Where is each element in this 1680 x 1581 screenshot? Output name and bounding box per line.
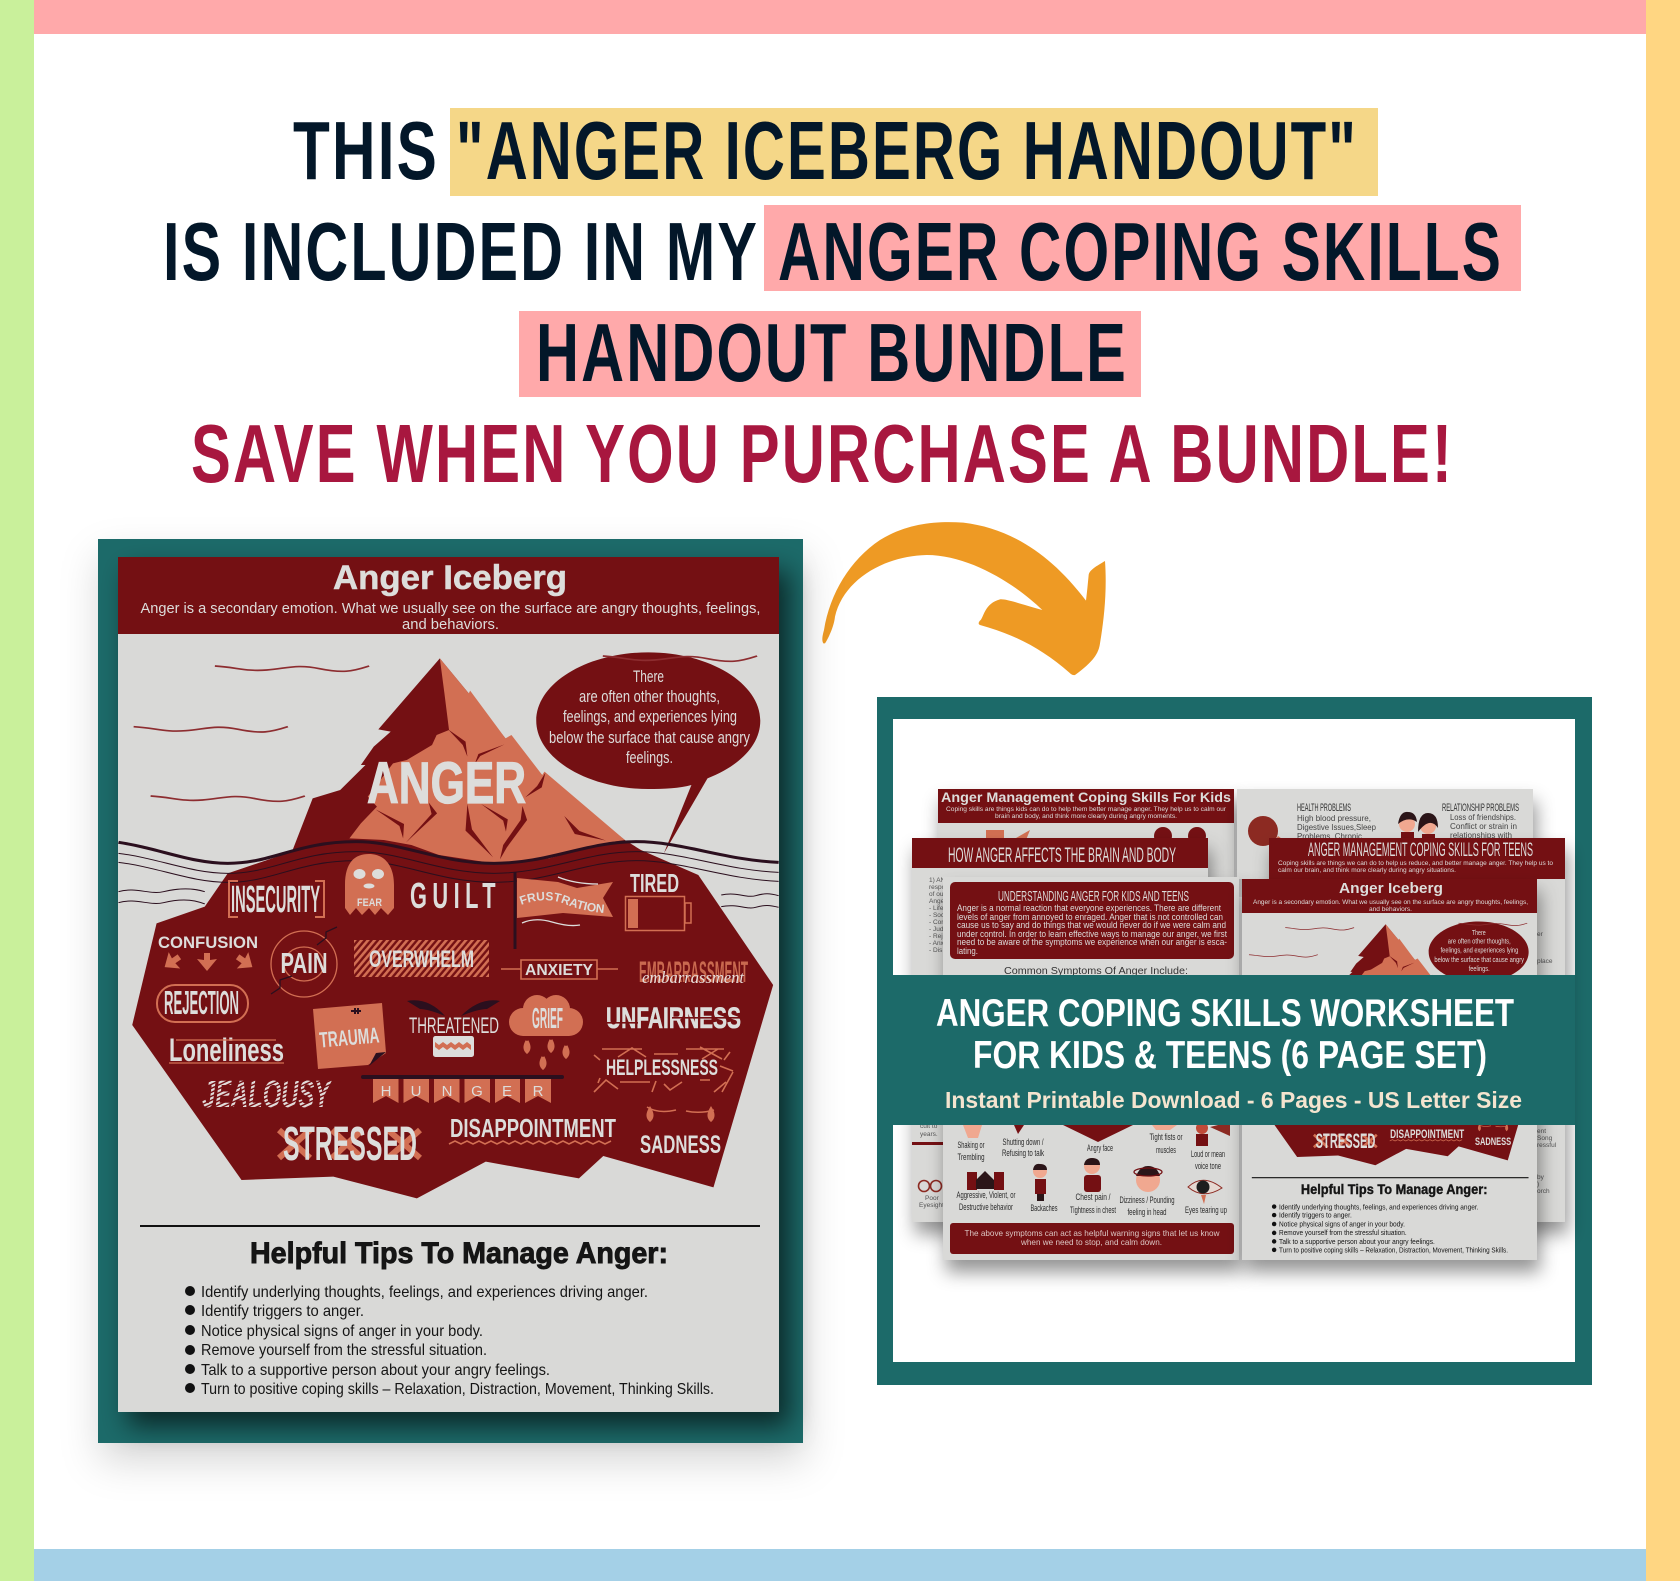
symptom labels: Backaches [1030,1203,1058,1213]
mini page: how anger affects the brain and body [912,838,1208,1222]
mini page: anger iceberg [1242,879,1537,1260]
icon: hunger banner [363,1077,562,1103]
word: loneliness [169,1032,284,1068]
mini page: understanding anger for kids and teens: lating. [957,946,978,956]
mini iceberg scaled: feelings, and experiences lying [1441,946,1518,955]
warning note box: when we need to stop, and calm down. [1020,1237,1162,1247]
symptom labels: Shaking or [958,1140,984,1150]
mini page: understanding anger for kids and teens: cause us to say and do things that we would never do if we were calm and [957,920,1226,930]
mini page: understanding anger for kids and teens [943,877,1239,1260]
mini page: anger iceberg: Anger Iceberg [1339,880,1443,897]
mini page: how anger affects the brain and body: - Dis [929,947,943,954]
handout header band: Anger Iceberg [333,559,567,597]
mini page: anger iceberg: and behaviors. [1369,906,1412,913]
border: right yellow band [1646,0,1680,1581]
word: pain with target [271,927,337,997]
mini page: how anger affects the brain and body: of ou [929,891,944,898]
panel: left teal handout frame [84,539,821,1477]
icon: fear ghost [345,854,394,915]
tips section: Identify underlying thoughts, feelings, and experiences driving anger. [201,1284,648,1301]
mini page: coping skills for teens: calm our brain, and think more clearly during angry situations. [1278,867,1456,874]
tips section: Helpful Tips To Manage Anger: [250,1237,668,1270]
label: ANGER: ANGER [367,751,526,816]
icon: threatened face [407,1000,500,1057]
symptom labels: Eyes tearing up [1185,1205,1227,1215]
word: unfairness [604,1002,742,1035]
word: loneliness: Loneliness [169,1032,284,1068]
word: helplessness hatched [594,1047,733,1092]
bubble text: feelings, and experiences lying [563,707,737,726]
bubble text: below the surface that cause angry [549,728,750,747]
symptom labels: Angry face [1087,1143,1113,1153]
panel: left teal handout frame: EMBARRASSMENT [639,956,748,989]
iceberg illustration [118,652,779,1198]
word: anxiety box [501,960,618,979]
iceberg cracks [376,729,606,859]
mini page: coping skills for teens: er [1537,931,1544,938]
mini iceberg scaled: SADNESS [1475,1136,1511,1148]
panel: right teal product frame [877,697,1592,1385]
symptom labels: Shutting down / [1002,1137,1044,1147]
mini iceberg scaled: feelings. [1469,964,1490,973]
mini page: coping skills for teens: ent [1537,1128,1546,1135]
symptom icons [963,1122,1230,1204]
word: confusion with arrows: CONFUSION [158,933,258,952]
mini page: how anger affects the brain and body: Eyesight [919,1202,944,1209]
banner: product title [893,975,1575,1125]
mini page: how anger affects the brain and body: respo [929,884,946,891]
mini page: coping skills for teens: by [1537,1174,1545,1181]
iceberg body [132,658,773,1198]
tips section: Remove yourself from the stressful situation. [201,1342,487,1359]
icon: trauma sticky note: TRAUMA [318,1022,380,1053]
tips section [140,1225,760,1398]
handout header band: Anger is a secondary emotion. What we usually see on the surface are angry thoughts, feelings, [140,601,760,617]
word: overwhelm scribble [354,940,489,977]
tips section: Talk to a supportive person about your angry feelings. [201,1362,550,1379]
warning note box [950,1223,1234,1254]
symptom labels: voice tone [1195,1161,1221,1171]
mini iceberg scaled: Turn to positive coping skills – Relaxation, Distraction, Movement, Thinking Skills. [1279,1247,1508,1255]
symptom labels: feeling in head [1128,1207,1166,1217]
water lines [118,842,779,908]
icon: hunger banner: U [411,1083,421,1100]
mini page: coping skills for teens: orch [1537,1188,1550,1195]
symptom labels: Tight fists or [1150,1132,1182,1142]
speech bubble [536,652,760,853]
mini page: coping skills for teens: ressful [1537,1142,1557,1149]
panel: left teal handout frame: REJECTION [164,984,239,1021]
title headline: THIS [293,104,439,197]
border: top pink band [0,0,1680,34]
word: embarrassment: embarrassment [642,968,745,987]
mini page: how anger affects the brain and body: - Anx [929,940,945,947]
icon: hunger banner: N [442,1083,452,1100]
symptom labels: Dizziness / Pounding [1120,1195,1174,1205]
mini page: how anger affects the brain and body: cult to [920,1123,938,1130]
mini page: health and relationship problems: RELATIONSHIP PROBLEMS [1442,802,1519,814]
handout header band: and behaviors. [402,617,499,633]
word: insecurity [229,879,324,921]
word: sadness: SADNESS [640,1131,721,1159]
mini iceberg scaled: Notice physical signs of anger in your body. [1279,1221,1405,1229]
word: pain with target: PAIN [280,948,328,980]
mini page: understanding anger for kids and teens: UNDERSTANDING ANGER FOR KIDS AND TEENS [998,888,1189,905]
word: helplessness hatched: HELPLESSNESS [606,1055,718,1080]
icon: frustration flag: FRUSTRATION [519,892,604,913]
mini page: health and relationship problems: High blood pressure, [1297,813,1371,823]
mini page: health and relationship problems: Digestive Issues,Sleep [1297,822,1376,832]
panel: left teal handout frame: INSECURITY [231,879,320,921]
symptom labels: Trembling [958,1152,984,1162]
word: disappointment: DISAPPOINTMENT [450,1113,616,1143]
mini iceberg scaled: There [1472,928,1486,937]
iceberg orange face [349,658,625,863]
symptom labels: Destructive behavior [959,1202,1013,1212]
symptom labels: Chest pain / [1076,1192,1111,1202]
icon: grief cloud: GRIEF [532,1003,563,1035]
symptom labels: Loud or mean [1191,1149,1225,1159]
word: jealousy: JEALOUSY [202,1074,332,1116]
tips section: Notice physical signs of anger in your body. [201,1323,483,1340]
mini page: coping skills for kids [938,789,1234,879]
mini page: coping skills for teens [1269,838,1565,1222]
mini iceberg scaled: STRESSED [1316,1129,1375,1153]
mini iceberg scaled: DISAPPOINTMENT [1390,1128,1464,1141]
mini iceberg scaled [1242,922,1537,1255]
mini page: coping skills for kids: Anger Management Coping Skills For Kids [941,789,1231,805]
word: guilt: GUILT [410,875,501,916]
mini page: how anger affects the brain and body: - Cor [929,919,944,926]
mini page: understanding anger for kids and teens: need to be aware of the symptoms we experience when our anger is esca- [957,937,1227,947]
title headline: IS INCLUDED IN MY [163,205,759,298]
word: overwhelm scribble: OVERWHELM [369,946,474,973]
icon: hunger banner: H [381,1083,391,1100]
icon: threatened face: THREATENED [409,1013,499,1038]
word: rejection pill [157,984,248,1022]
mini page: coping skills for teens: Song [1537,1135,1553,1142]
icon: trauma sticky note [313,1003,386,1069]
symptom labels: Refusing to talk [1002,1148,1044,1158]
handout page [118,557,779,1412]
mini page: health and relationship problems: HEALTH PROBLEMS [1297,802,1351,814]
bubble text [549,667,750,767]
mini page: health and relationship problems: Problems, Chronic [1297,831,1363,841]
mini page: how anger affects the brain and body: Ange [929,898,945,905]
symptom labels: Tightness in chest [1070,1205,1116,1215]
mini page: how anger affects the brain and body: - Rej [929,933,943,940]
mini iceberg scaled: Identify underlying thoughts, feelings, and experiences driving anger. [1279,1203,1479,1211]
word: embarrassment [639,956,748,989]
tips section: Turn to positive coping skills – Relaxation, Distraction, Movement, Thinking Skills. [201,1381,714,1398]
mini page: health and relationship problems: Loss of friendships. [1450,812,1516,822]
icon: hunger banner: E [502,1083,512,1100]
word: anxiety box: ANXIETY [525,962,593,979]
bubble text: There [633,667,664,686]
word: stressed: STRESSED [283,1118,417,1171]
mini page: understanding anger for kids and teens: Common Symptoms Of Anger Include: [1004,965,1188,977]
mini page: coping skills for teens: Coping skills are things we can do to help us reduce, and better manage anger. They help us to [1278,860,1553,867]
mini page: anger iceberg: Anger is a secondary emotion. What we usually see on the surface are angry thoughts, feelings, [1253,899,1528,906]
mini iceberg scaled: Helpful Tips To Manage Anger: [1301,1182,1487,1197]
border: bottom blue band [34,1549,1646,1581]
highlight: anger iceberg handout [450,108,1378,196]
banner: product title: Instant Printable Download - 6 Pages - US Letter Size [945,1087,1522,1113]
mini iceberg scaled: Identify triggers to anger. [1279,1212,1352,1220]
banner: product title: FOR KIDS & TEENS (6 PAGE SET) [973,1034,1487,1077]
mini page: how anger affects the brain and body: HOW ANGER AFFECTS THE BRAIN AND BODY [948,844,1176,867]
highlight: anger coping skills [764,205,1521,291]
lower word decorations [279,1107,714,1158]
mini page: how anger affects the brain and body: 1) AN [929,877,946,884]
symptom labels [956,1132,1227,1217]
border: left green band [0,0,34,1581]
mini iceberg scaled: below the surface that cause angry [1434,955,1524,964]
title headline: HANDOUT BUNDLE [536,306,1128,399]
mini page: health and relationship problems [1237,789,1533,879]
icon: grief cloud [509,995,583,1068]
symptom labels: muscles [1156,1145,1176,1155]
icon: fear ghost: FEAR [357,897,382,909]
mini page: coping skills for kids: brain and body, and think more clearly during angry moments. [995,813,1177,820]
bubble text: are often other thoughts, [579,687,720,706]
icon: tired battery: TIRED [630,868,679,898]
warning note box: The above symptoms can act as helpful warning signs that let us know [964,1228,1220,1238]
highlight: handout bundle [519,311,1141,397]
mini page: understanding anger for kids and teens: under control. In order to learn effective ways to manage our anger, we first [957,929,1227,939]
mini page: how anger affects the brain and body: - Jud [929,926,944,933]
icon: hunger banner: R [533,1083,544,1100]
icon: hunger banner: G [471,1083,483,1100]
title headline [163,104,1521,500]
mini page: health and relationship problems: relationships with [1450,830,1512,840]
sky wave lines [134,666,369,801]
mini page: coping skills for kids: Coping skills are things kids can do to help them better manage anger. They help us to calm our [946,806,1227,813]
symptom labels: Aggressive, Violent, or [956,1190,1016,1200]
mini page: coping skills for teens: place [1537,958,1553,965]
arrow: orange curved arrow [822,522,1106,675]
mini page: how anger affects the brain and body: Poor [925,1195,940,1202]
mini page: coping skills for teens: ) [1537,1181,1539,1188]
mini iceberg scaled: Talk to a supportive person about your angry feelings. [1279,1238,1435,1246]
mini page: understanding anger for kids and teens: levels of anger from annoyed to enraged. Anger that is not controlled can [957,912,1223,922]
handout header band [118,557,779,634]
icon: frustration flag [514,872,613,949]
mini page: how anger affects the brain and body: - Life [929,905,944,912]
mini iceberg scaled: are often other thoughts, [1448,937,1511,946]
mini page: how anger affects the brain and body: - Soc [929,912,945,919]
word: unfairness: UNFAIRNESS [606,1002,741,1035]
tips section: Identify triggers to anger. [201,1303,364,1320]
banner: product title: ANGER COPING SKILLS WORKSHEET [936,992,1514,1035]
icon: tired battery [626,868,691,930]
mini page: how anger affects the brain and body: years. [920,1131,938,1138]
mini page: health and relationship problems: Conflict or strain in [1450,821,1517,831]
bubble text: feelings. [626,748,673,767]
word: confusion with arrows [158,933,258,975]
mini page: understanding anger for kids and teens: Anger is a normal reaction that everyone experiences. There are different [957,903,1221,913]
mini iceberg scaled: Remove yourself from the stressful situation. [1279,1229,1407,1237]
